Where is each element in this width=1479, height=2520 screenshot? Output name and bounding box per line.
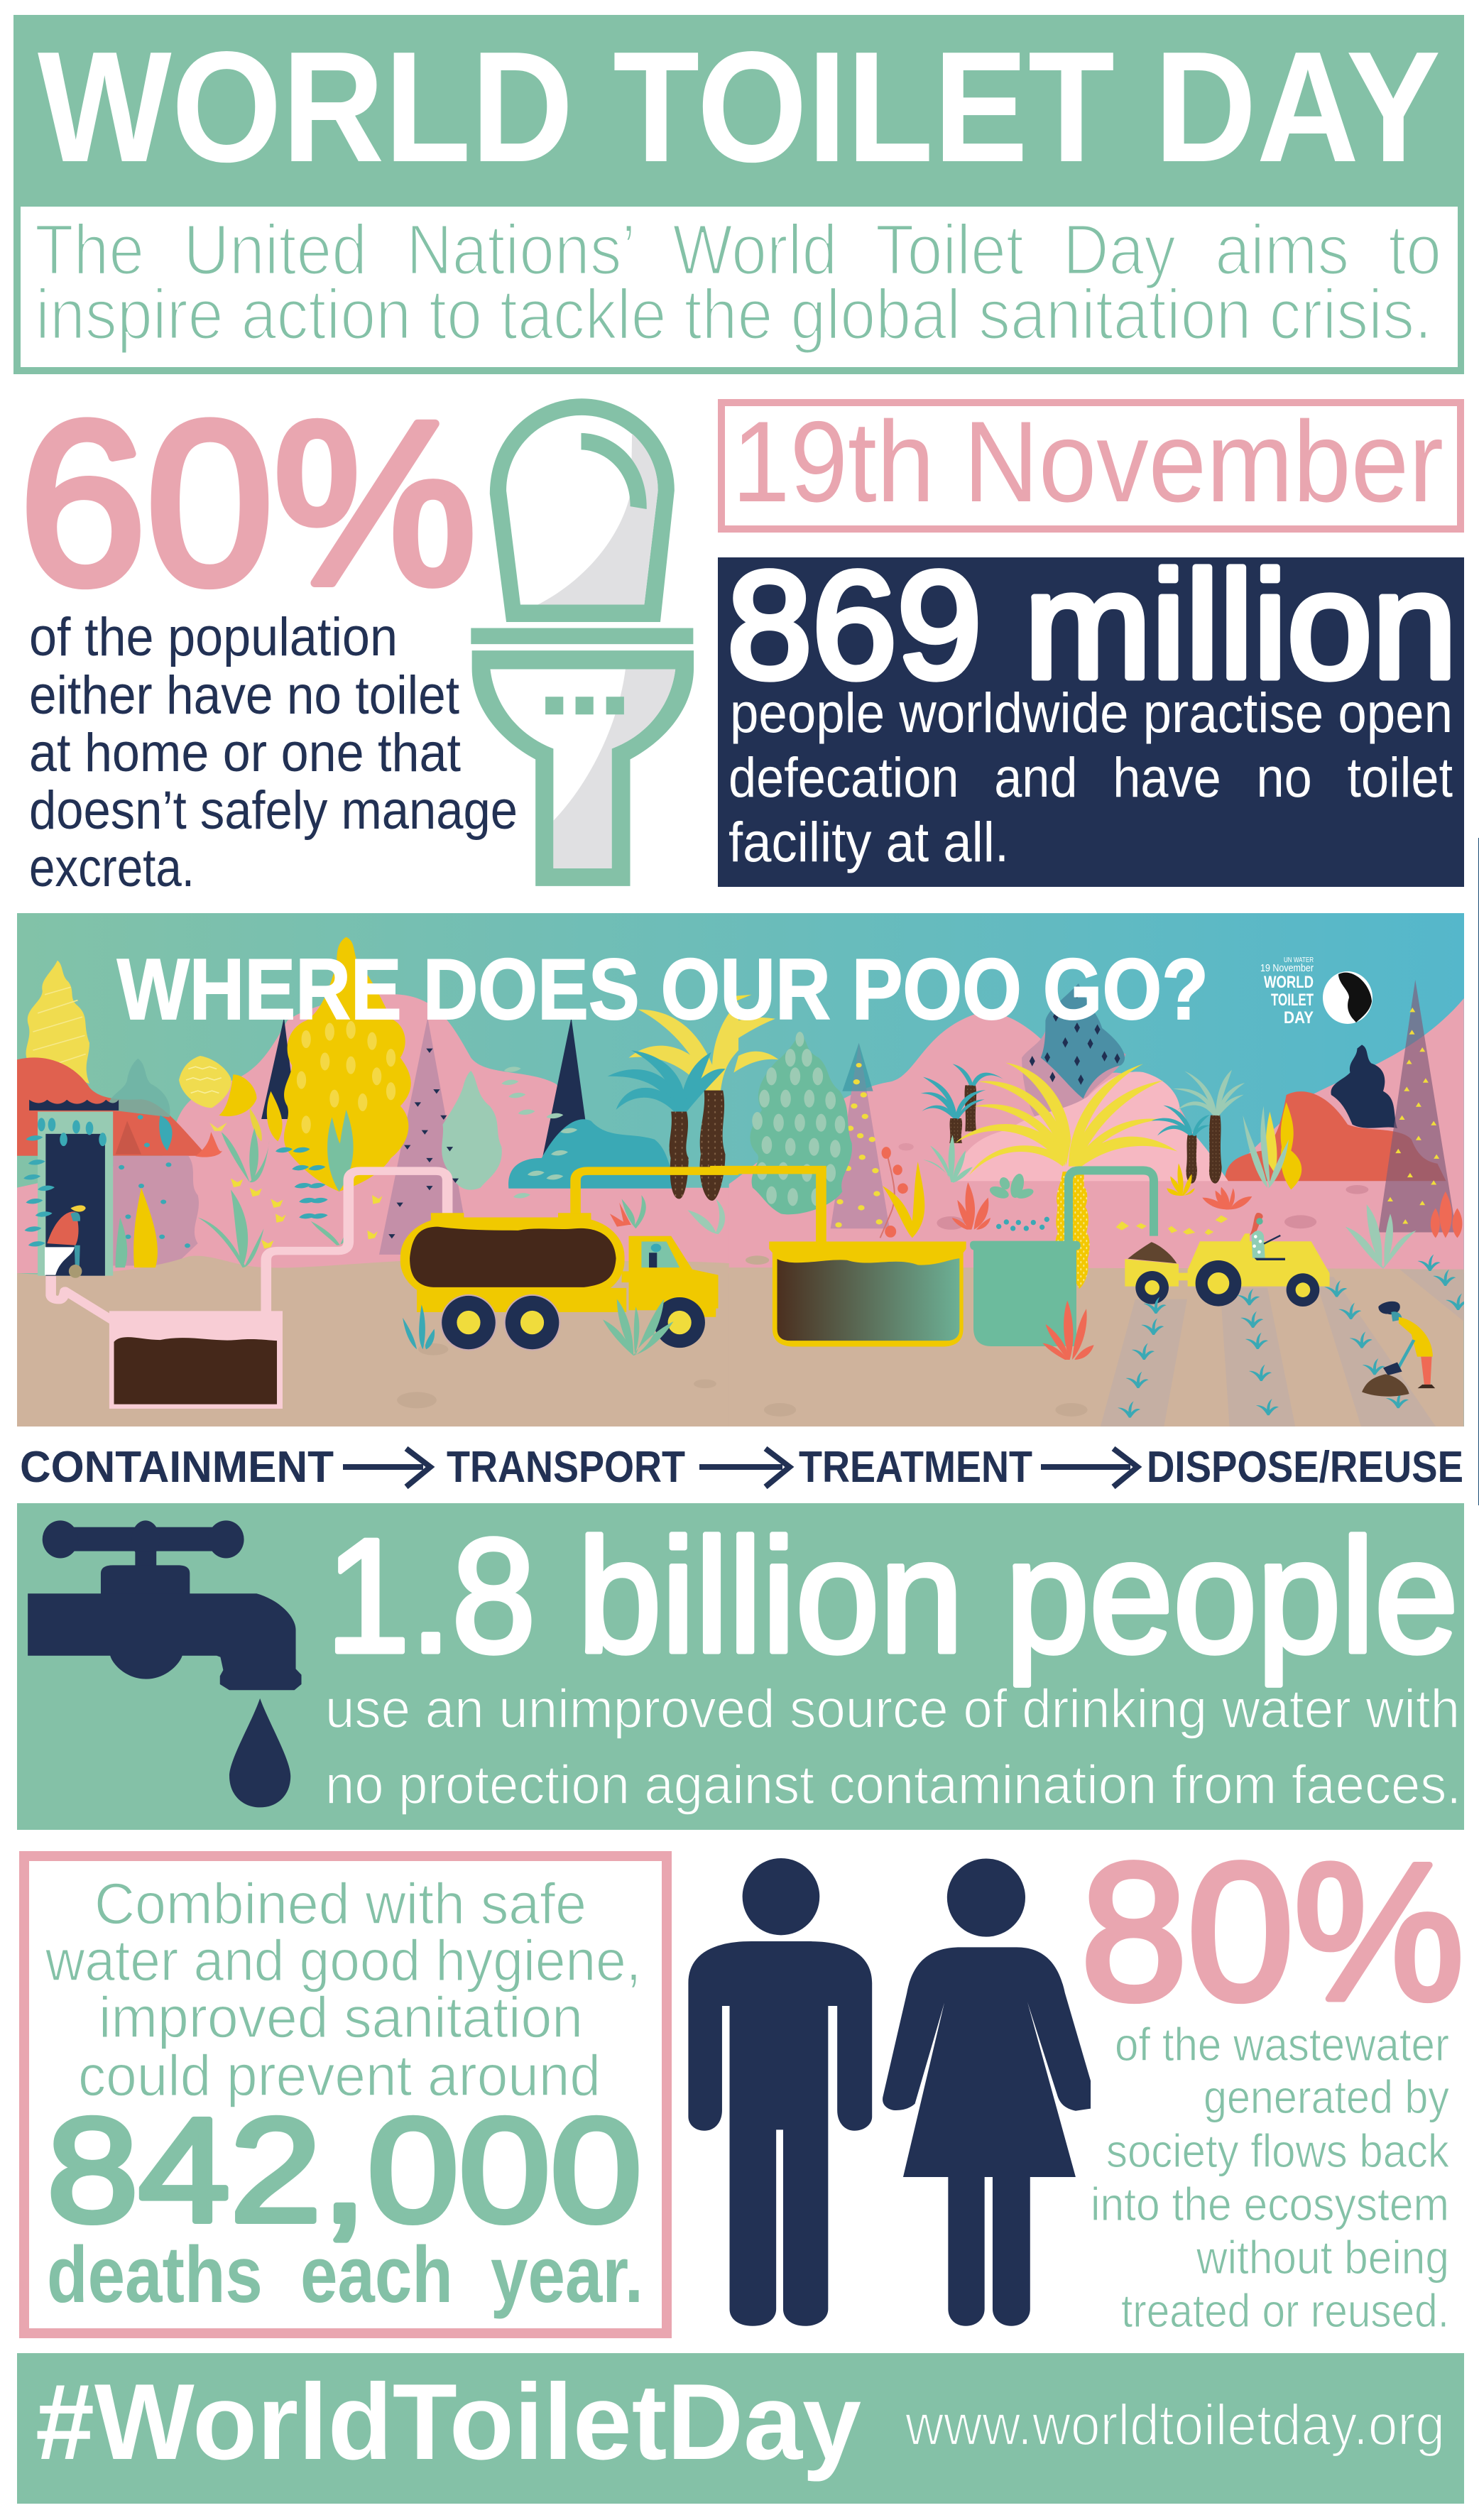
green tank and pipe — [1069, 1170, 1154, 1241]
header panel — [13, 15, 1464, 374]
treatment tank 1 — [710, 1170, 966, 1347]
icon: woman — [883, 1858, 1091, 2326]
panel: 842,000 deaths: water and good hygiene, — [45, 1929, 641, 1993]
driver — [1250, 1213, 1285, 1260]
panel: 869 million: facility at all. — [728, 810, 1009, 873]
arrow: containment to transport — [343, 1449, 430, 1487]
illustration: sanitation chain landscape — [17, 913, 1468, 1429]
60% description: either have no toilet — [29, 665, 459, 726]
arrow: treatment to dispose — [1041, 1449, 1137, 1487]
icon: toilet — [471, 398, 694, 886]
thin right edge line — [1478, 838, 1479, 1505]
right half of landscape: hills and trees — [729, 980, 1464, 1429]
tank 2, tractor, plants and field sprouts — [923, 1135, 1468, 1418]
60% description: at home or one that — [29, 723, 461, 783]
process labels — [20, 1443, 1463, 1492]
tanker truck — [576, 1171, 738, 1218]
hashtag: #WorldToiletDay — [36, 2362, 861, 2482]
containment pit and pipe — [51, 1276, 113, 1321]
tractor body — [1188, 1233, 1330, 1287]
60% description: doesn’t safely manage — [29, 780, 518, 841]
water text — [325, 1679, 1461, 1816]
sage and yellow reeds — [1281, 1102, 1301, 1189]
arrow: transport to treatment — [699, 1449, 790, 1487]
wastewater text: into the ecosystem — [1091, 2178, 1449, 2230]
panel: 842,000 deaths — [24, 1856, 667, 2333]
red plant by tank — [952, 1182, 1252, 1360]
website: www.worldtoiletday.org — [905, 2393, 1445, 2458]
big yellow palm — [955, 1063, 1177, 1175]
logo: World Toilet Day: DAY — [1284, 1008, 1314, 1027]
tractor wheels — [1135, 1260, 1319, 1307]
60% description — [29, 607, 518, 898]
panel: 869 million: 869 million — [727, 540, 1457, 710]
panel: 842,000 deaths: improved sanitation — [99, 1985, 583, 2050]
60% description: excreta. — [29, 838, 195, 898]
wheat plant — [1431, 1191, 1462, 1238]
wastewater text: without being — [1196, 2231, 1449, 2284]
footer panel — [17, 2353, 1464, 2504]
farmer — [1362, 1302, 1435, 1397]
left half of landscape — [17, 937, 738, 1429]
label: transport: TRANSPORT — [447, 1443, 685, 1492]
label: treatment: TREATMENT — [799, 1443, 1032, 1492]
wastewater text: of the wastewater — [1115, 2018, 1449, 2071]
icon: man — [688, 1858, 872, 2326]
logo: World Toilet Day: 19 November — [1260, 962, 1314, 974]
wastewater text: society flows back — [1106, 2124, 1450, 2177]
panel: 842,000 deaths: 842,000 — [47, 2088, 642, 2253]
yellow sprig — [1116, 1216, 1228, 1235]
illustration heading: WHERE DOES OUR POO GO? — [117, 941, 1208, 1037]
tractor trailer — [1128, 1242, 1177, 1263]
label: containment: CONTAINMENT — [20, 1443, 334, 1492]
shrubs and plants — [179, 1056, 231, 1108]
field sprouts — [1118, 1255, 1468, 1418]
wastewater text — [1091, 2018, 1450, 2337]
60% statistic: 60% — [19, 374, 476, 633]
water text: use an unimproved source of drinking water with — [325, 1679, 1460, 1740]
palms and pale hill — [921, 1063, 1468, 1302]
red plant 2 — [966, 1182, 975, 1230]
red plant 3 — [1202, 1198, 1227, 1209]
panel: 842,000 deaths: Combined with safe — [94, 1872, 586, 1936]
panel: 842,000 deaths: deaths each year. — [47, 2230, 643, 2319]
icon: tap and drop — [28, 1520, 302, 1807]
80% statistic: 80% — [1081, 1823, 1464, 2041]
yellow palm trunk — [1056, 1172, 1090, 1289]
panel: 869 million — [718, 540, 1464, 887]
60% description: of the population — [29, 607, 398, 667]
panel: 842,000 deaths: could prevent around — [78, 2044, 601, 2108]
logo: World Toilet Day: TOILET — [1271, 991, 1314, 1010]
icon: man and woman — [688, 1858, 1091, 2326]
panel: 1.8 billion people — [17, 1503, 1464, 1830]
sage plant — [923, 1135, 973, 1183]
outhouse and user — [29, 1100, 119, 1111]
green leaves — [990, 1174, 1034, 1199]
left palms — [949, 1085, 976, 1143]
logo: World Toilet Day — [1260, 956, 1372, 1027]
right palms — [1186, 1116, 1222, 1184]
intro text box — [21, 207, 1458, 367]
wastewater text: generated by — [1204, 2071, 1449, 2123]
yellow plant — [1167, 1163, 1195, 1196]
logo: World Toilet Day: UN WATER — [1284, 956, 1314, 964]
flower stem — [880, 1155, 895, 1238]
water text: no protection against contamination from faeces. — [325, 1755, 1461, 1816]
logo: World Toilet Day: WORLD — [1264, 973, 1314, 992]
